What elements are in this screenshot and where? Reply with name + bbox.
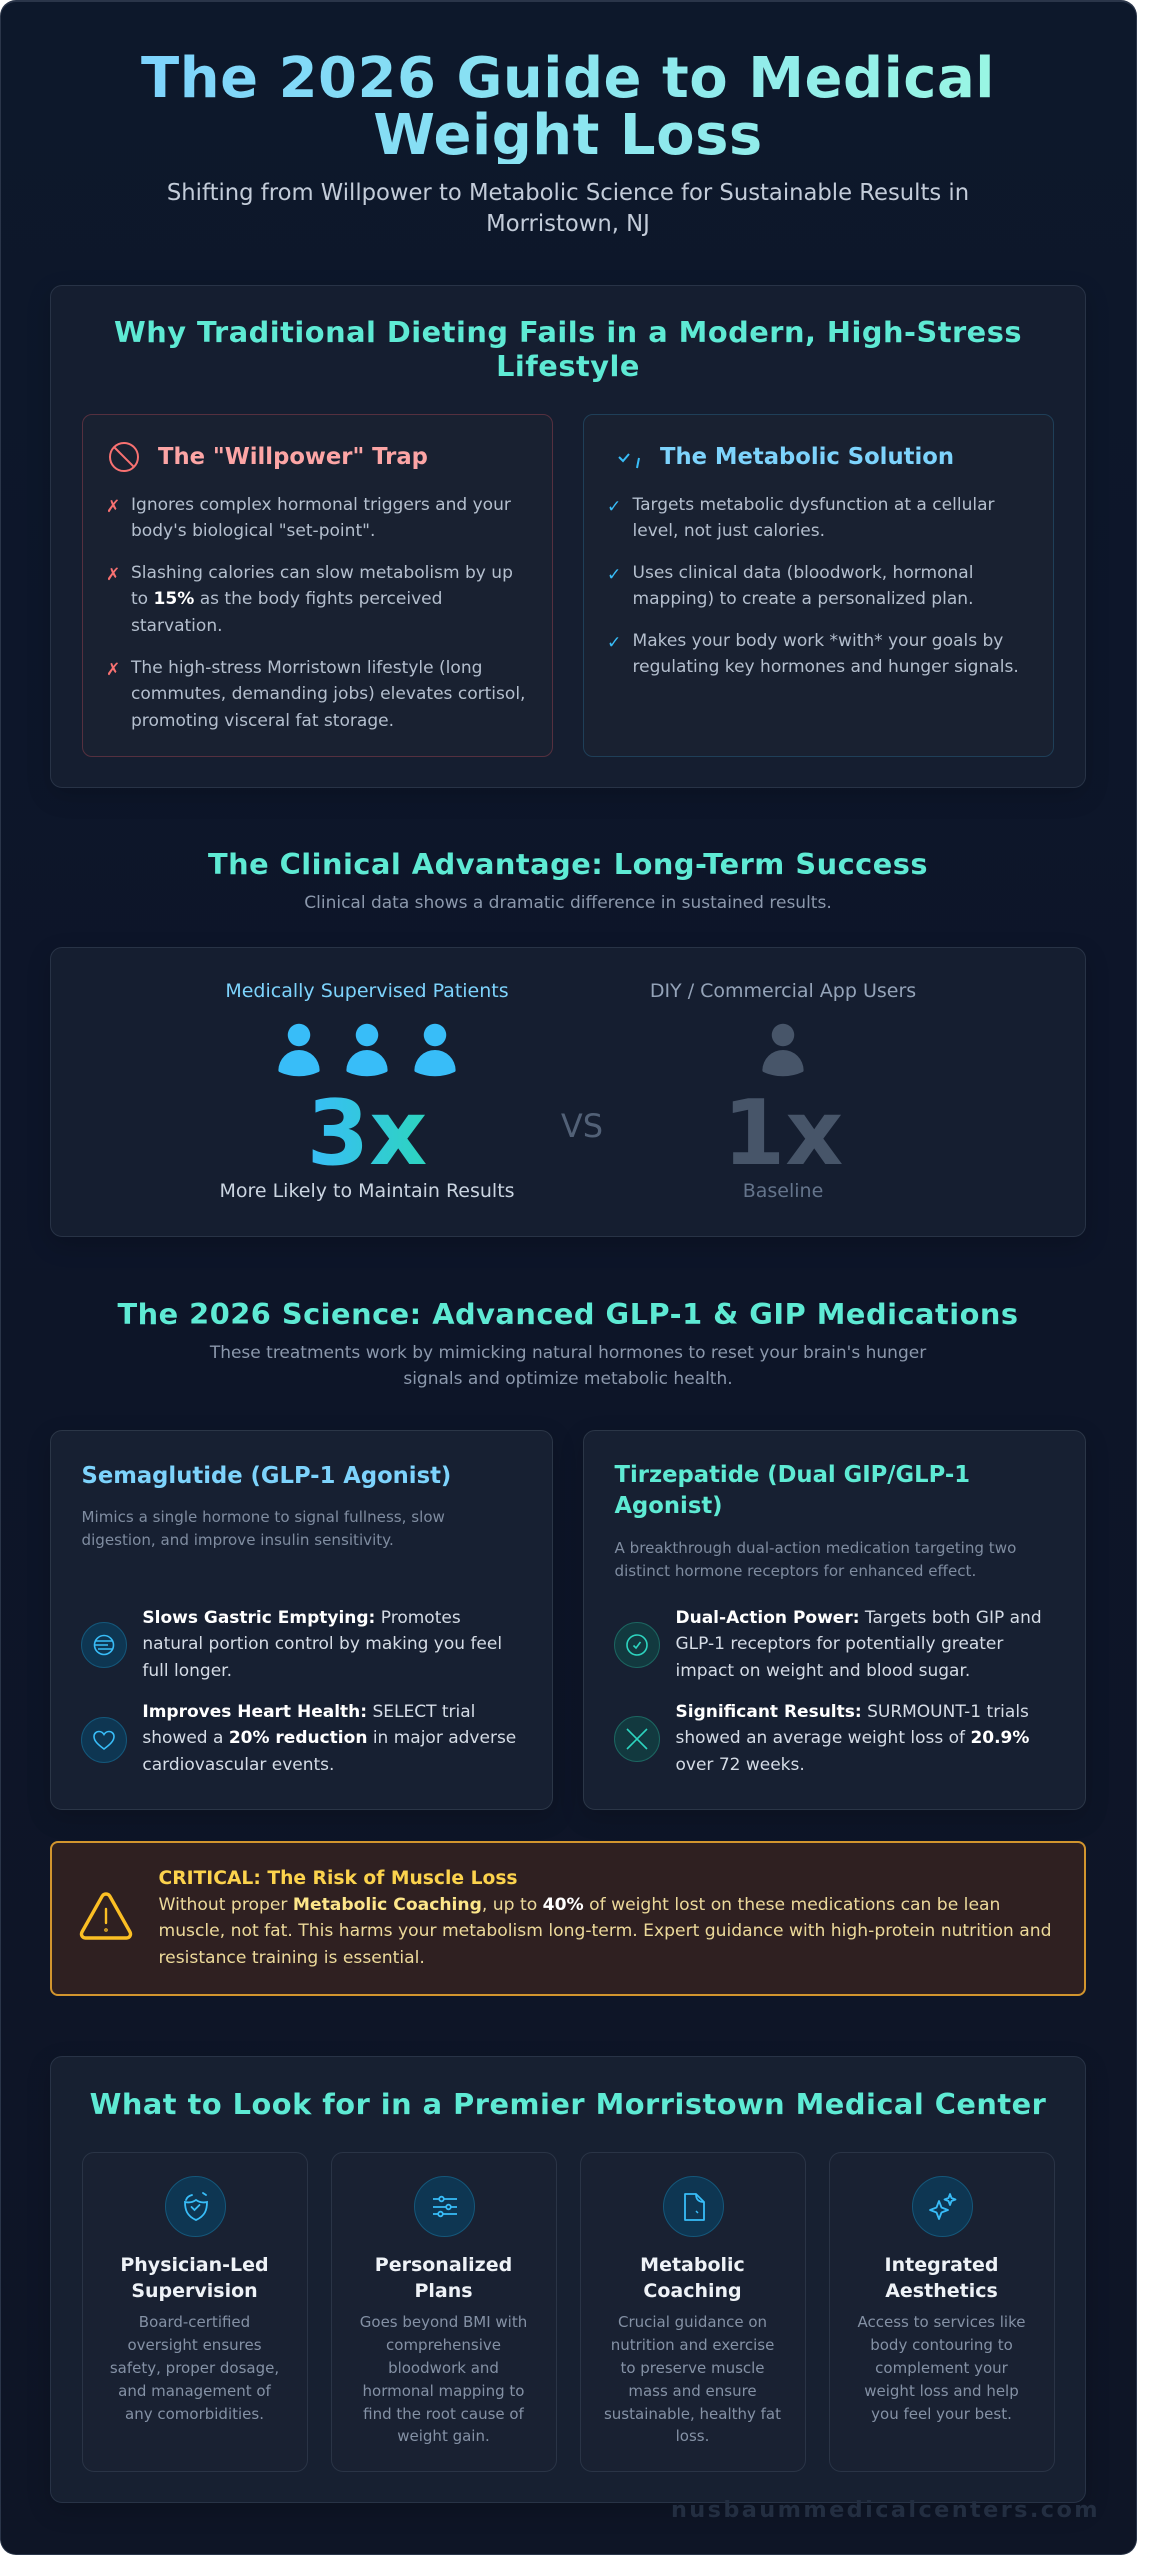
point 3 <box>130 658 525 731</box>
subheading: clinical advantage: Clinical data shows a dramatic difference in sustained results. <box>304 893 832 913</box>
text: dual-action power: Dual-Action Power: Targets both GIP and <box>676 1608 1042 1628</box>
heading: clinical advantage: The Clinical Advantage: Long-Term Success <box>208 847 928 881</box>
point 1: body's biological "set-point". <box>131 521 375 541</box>
panel: willpower trap <box>82 414 553 757</box>
card title: Integrated <box>885 2254 998 2276</box>
check 3: ✓ <box>607 633 621 653</box>
card text: you feel your best. <box>871 2405 1012 2423</box>
icon: no sign <box>109 442 139 472</box>
card text: Board-certified <box>139 2313 250 2331</box>
text: significant results: showed an average weight loss of 20.9% <box>676 1728 1029 1748</box>
text: significant results: over 72 weeks. <box>676 1755 805 1775</box>
text: slows gastric emptying <box>142 1608 502 1681</box>
icon: cross <box>614 1716 660 1762</box>
point 3 <box>632 631 1019 677</box>
heading: tirzepatide <box>614 1462 970 1519</box>
card title <box>120 2254 269 2302</box>
card text: body contouring to <box>870 2336 1013 2354</box>
card text: complement your <box>875 2359 1008 2377</box>
card: integrated aesthetics <box>828 2152 1054 2472</box>
icon: double check <box>618 453 640 468</box>
card title <box>640 2254 745 2302</box>
card text: and management of <box>118 2382 271 2400</box>
text: VS: VS <box>561 1107 603 1145</box>
point 1 <box>131 495 511 541</box>
card title: Supervision <box>131 2280 258 2302</box>
icon: check circle <box>614 1622 660 1668</box>
panel: semaglutide <box>50 1430 553 1810</box>
point 1: level, not just calories. <box>632 521 825 541</box>
subtitle: Morristown, NJ <box>486 211 650 237</box>
card text: Goes beyond BMI with <box>360 2313 527 2331</box>
card text: loss. <box>676 2427 709 2445</box>
icon: sliders <box>414 2176 474 2237</box>
panel: tirzepatide <box>583 1430 1086 1810</box>
card text: sustainable, healthy fat <box>604 2405 781 2423</box>
card text <box>604 2313 781 2445</box>
point 3: The high-stress Morristown lifestyle (long <box>131 658 482 678</box>
text: improves heart health: showed a 20% reduction in major adverse <box>142 1728 516 1748</box>
card text: safety, proper dosage, <box>110 2359 279 2377</box>
heading: tirzepatide: Tirzepatide (Dual GIP/GLP-1 <box>614 1462 970 1488</box>
list: willpower trap points <box>106 495 525 731</box>
icon: heart <box>81 1716 127 1762</box>
point 1: Ignores complex hormonal triggers and your <box>131 495 511 515</box>
heading: willpower trap: The "Willpower" Trap <box>158 444 428 470</box>
icon: one user <box>762 1024 804 1076</box>
description: semaglutide <box>82 1508 445 1549</box>
card text: any comorbidities. <box>125 2405 264 2423</box>
title <box>141 46 995 168</box>
description: tirzepatide: distinct hormone receptors for enhanced effect. <box>614 1562 976 1580</box>
point 2 <box>632 563 974 609</box>
icon: shield check <box>164 2176 226 2237</box>
point 2: mapping) to create a personalized plan. <box>632 589 974 609</box>
text: dual-action power: impact on weight and blood sugar. <box>676 1661 970 1681</box>
callout text <box>158 1895 1052 1968</box>
card text: oversight ensures <box>127 2336 262 2354</box>
callout text: Without proper Metabolic Coaching, up to 40% of weight lost on these medications can be lean <box>158 1895 1000 1915</box>
card title: Plans <box>414 2280 473 2302</box>
card text: hormonal mapping to <box>363 2382 524 2400</box>
title: Weight Loss <box>373 103 763 168</box>
subtitle: Shifting from Willpower to Metabolic Science for Sustainable Results in <box>167 180 969 206</box>
icon: document <box>662 2176 724 2237</box>
subtitle <box>167 180 969 237</box>
card: physician-led supervision <box>82 2152 308 2472</box>
bullet 3: ✗ <box>106 660 120 680</box>
card title: Physician-Led <box>120 2254 269 2276</box>
heading: why dieting fails: Lifestyle <box>496 349 640 383</box>
point 3: Makes your body work *with* your goals by <box>632 631 1003 651</box>
icon: warning triangle <box>80 1892 132 1940</box>
title: The 2026 Guide to Medical <box>141 46 995 111</box>
card text: find the root cause of <box>363 2405 524 2423</box>
heading: tirzepatide: Agonist) <box>614 1493 723 1519</box>
card text <box>110 2313 279 2423</box>
point 2 <box>131 563 513 636</box>
point 1: Targets metabolic dysfunction at a cellular <box>632 495 995 515</box>
panel: comparison <box>50 947 1086 1237</box>
text: improves heart health: Improves Heart Health: SELECT trial <box>142 1702 475 1722</box>
card text: mass and ensure <box>628 2382 757 2400</box>
text: dual-action power: GLP-1 receptors for potentially greater <box>676 1634 1003 1654</box>
caption: more likely: More Likely to Maintain Results <box>219 1180 515 1202</box>
heading: 2026 science: The 2026 Science: Advanced GLP-1 & GIP Medications <box>117 1297 1019 1331</box>
callout text: muscle, not fat. This harms your metabolism long-term. Expert guidance with high-protein nutrition and <box>158 1921 1052 1941</box>
card text: Crucial guidance on <box>618 2313 767 2331</box>
callout: muscle loss <box>50 1841 1086 1996</box>
point 2: Slashing calories can slow metabolism by up <box>131 563 513 583</box>
text: significant results <box>676 1702 1029 1775</box>
card text: comprehensive <box>386 2336 501 2354</box>
point 1 <box>632 495 995 541</box>
card text <box>858 2313 1025 2423</box>
check 1: ✓ <box>607 497 621 517</box>
stat: 1x: 1x <box>723 1081 843 1186</box>
point 2: to 15% as the body fights perceived <box>131 589 442 609</box>
card text <box>360 2313 527 2445</box>
text: slows gastric emptying: Slows Gastric Emptying: Promotes <box>142 1608 461 1628</box>
card title: Metabolic <box>640 2254 745 2276</box>
card: personalized plans <box>330 2152 556 2472</box>
card title <box>885 2254 998 2302</box>
card title <box>375 2254 512 2302</box>
text: dual-action power <box>676 1608 1042 1681</box>
subheading: 2026 science: These treatments work by mimicking natural hormones to reset your brain's hunger <box>210 1342 926 1362</box>
panel: premier center <box>50 2056 1086 2503</box>
icon: three patients <box>278 1024 456 1076</box>
check 2: ✓ <box>607 565 621 585</box>
heading: metabolic solution: The Metabolic Solution <box>660 444 954 470</box>
point 2: Uses clinical data (bloodwork, hormonal <box>632 563 973 583</box>
label: DIY users: DIY / Commercial App Users <box>650 980 916 1002</box>
subheading: 2026 science <box>210 1342 926 1389</box>
text: significant results: Significant Results: SURMOUNT-1 trials <box>676 1702 1029 1722</box>
panel: metabolic solution <box>583 414 1054 757</box>
text: slows gastric emptying: natural portion control by making you feel <box>142 1634 502 1654</box>
point 3: regulating key hormones and hunger signals. <box>632 657 1019 677</box>
text: improves heart health: cardiovascular events. <box>142 1755 334 1775</box>
card text: Access to services like <box>858 2313 1025 2331</box>
label: medically supervised: Medically Supervised Patients <box>225 980 509 1002</box>
card text: weight gain. <box>397 2427 490 2445</box>
card text: nutrition and exercise <box>611 2336 774 2354</box>
panel: why dieting fails <box>50 285 1086 788</box>
caption: baseline: Baseline <box>743 1180 823 1202</box>
card text: bloodwork and <box>388 2359 499 2377</box>
card: metabolic coaching <box>580 2152 806 2472</box>
text: slows gastric emptying: full longer. <box>142 1661 232 1681</box>
callout text: resistance training is essential. <box>158 1948 425 1968</box>
point 3: commutes, demanding jobs) elevates cortisol, <box>131 684 525 704</box>
card title: Personalized <box>375 2254 512 2276</box>
card text: to preserve muscle <box>620 2359 765 2377</box>
description: semaglutide: Mimics a single hormone to signal fullness, slow <box>82 1508 445 1526</box>
heading: semaglutide: Semaglutide (GLP-1 Agonist) <box>82 1463 451 1489</box>
card text: weight loss and help <box>864 2382 1019 2400</box>
description: tirzepatide: A breakthrough dual-action medication targeting two <box>614 1539 1016 1557</box>
point 2: starvation. <box>131 616 223 636</box>
watermark: nusbaummedicalcenters.com <box>671 2497 1100 2523</box>
heading: why dieting fails: Why Traditional Dieting Fails in a Modern, High-Stress <box>114 315 1022 349</box>
callout title: CRITICAL: The Risk of Muscle Loss <box>158 1868 518 1888</box>
bullet 1: ✗ <box>106 497 120 517</box>
list: metabolic solution points <box>607 495 1019 677</box>
point 3: promoting visceral fat storage. <box>131 711 394 731</box>
description: semaglutide: digestion, and improve insulin sensitivity. <box>82 1531 394 1549</box>
card title: Coaching <box>643 2280 742 2302</box>
card title: Aesthetics <box>885 2280 998 2302</box>
stat: 3x: 3x <box>307 1081 427 1186</box>
heading: premier center: What to Look for in a Premier Morristown Medical Center <box>90 2087 1046 2121</box>
heading: why dieting fails <box>114 315 1022 383</box>
text: improves heart health <box>142 1702 516 1775</box>
description: tirzepatide <box>614 1539 1016 1580</box>
icon: gastric <box>81 1622 127 1668</box>
icon: sparkles <box>912 2176 972 2237</box>
subheading: 2026 science: signals and optimize metabolic health. <box>403 1369 733 1389</box>
bullet 2: ✗ <box>106 565 120 585</box>
